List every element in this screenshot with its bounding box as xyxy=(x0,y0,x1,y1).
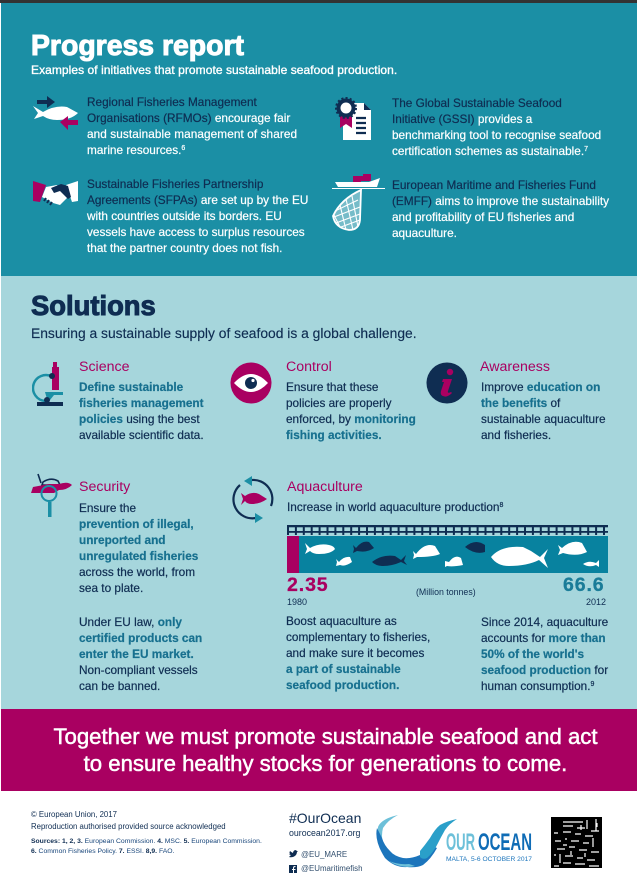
subheading: progress report: Examples of initiatives that promote sustainable seafood production. xyxy=(31,63,397,77)
text: security: prevention of illegal, xyxy=(79,517,194,531)
text: boost aquaculture: seafood production. xyxy=(286,678,399,692)
footer: sources xyxy=(31,838,262,855)
text: science xyxy=(79,380,204,442)
fish shoal xyxy=(305,542,599,568)
text: control xyxy=(286,380,416,442)
logo: our ocean xyxy=(376,815,532,868)
unit label: (Million tonnes) xyxy=(416,587,476,597)
icon: security xyxy=(31,474,72,517)
panel: progress report xyxy=(1,3,637,276)
text: RFMOs: Regional Fisheries Management xyxy=(87,95,257,109)
text: RFMOs xyxy=(87,95,297,157)
text: chart title: Increase in world aquaculture production8 xyxy=(287,500,503,514)
text: boost aquaculture: and make sure it becomes xyxy=(286,646,424,660)
text: EMFF: aquaculture. xyxy=(392,226,457,240)
text: security: across the world, from xyxy=(79,565,195,579)
banner: call to action xyxy=(1,709,637,791)
text: EMFF xyxy=(392,178,610,240)
text: science: fisheries management xyxy=(79,396,204,410)
icon: microscope xyxy=(32,362,63,406)
value: 1980: 2.35 xyxy=(287,574,329,596)
text: science: Define sustainable xyxy=(79,380,183,394)
hashtag: #OurOcean xyxy=(289,810,361,826)
text: awareness: sustainable aquaculture xyxy=(481,412,606,426)
footer: sources: 6. Common Fisheries Policy. 7. ESSI. 8,9. FAO. xyxy=(31,848,174,855)
text: RFMOs: and sustainable management of shared xyxy=(87,127,297,141)
text: GSSI: The Global Sustainable Seafood xyxy=(392,96,562,110)
logo: our ocean: OUR xyxy=(446,829,475,856)
heading: awareness: Awareness xyxy=(480,359,550,375)
text: security: sea to plate. xyxy=(79,581,143,595)
banner: call to action: to ensure healthy stocks for generations to come. xyxy=(84,751,567,776)
text: EU law: enter the EU market. xyxy=(79,647,194,661)
text: RFMOs: Organisations (RFMOs) encourage fair xyxy=(87,111,290,125)
text: since 2014: 50% of the world's xyxy=(481,647,584,661)
footer: sources: Sources: 1, 2, 3. European Commission. 4. MSC. 5. European Commission. xyxy=(31,838,262,845)
text: SFPAs: that the partner country does not fish. xyxy=(87,241,282,255)
text: EU law: Non-compliant vessels xyxy=(79,663,198,677)
icon: fish with arrows xyxy=(33,96,78,130)
text: GSSI: Initiative (GSSI) provides a xyxy=(392,112,532,126)
text: GSSI: benchmarking tool to recognise seafood xyxy=(392,128,601,142)
text: boost aquaculture: complementary to fisheries, xyxy=(286,630,430,644)
text: boost aquaculture: a part of sustainable xyxy=(286,662,401,676)
logo: our ocean: MALTA, 5-6 OCTOBER 2017 xyxy=(446,856,532,863)
text: awareness: the benefits of xyxy=(481,396,560,410)
banner: call to action: Together we must promote sustainable seafood and act xyxy=(53,724,598,749)
text: EMFF: and profitability of EU fisheries and xyxy=(392,210,574,224)
subheading: solutions: Ensuring a sustainable supply of seafood is a global challenge. xyxy=(31,325,417,341)
text: SFPAs: Agreements (SFPAs) are set up by the EU xyxy=(87,193,308,207)
icon: trawler and net xyxy=(332,174,385,231)
handle: facebook: @EUmaritimefish xyxy=(301,864,362,873)
footer: copyright: © European Union, 2017 xyxy=(31,810,117,819)
heading: science: Science xyxy=(79,359,129,375)
text: EMFF: (EMFF) aims to improve the sustainability xyxy=(392,194,609,208)
text: security: unregulated fisheries xyxy=(79,549,198,563)
text: SFPAs xyxy=(86,177,308,255)
icon: certificate xyxy=(335,97,371,140)
text: control: enforced, by monitoring xyxy=(286,412,416,426)
text: EU law: Under EU law, only xyxy=(79,615,182,629)
handle: twitter: @EU_MARE xyxy=(301,850,347,859)
value: 2012: 66.6 xyxy=(563,574,605,596)
text: security: unreported and xyxy=(79,533,166,547)
icon: aquaculture cycle xyxy=(232,476,274,523)
icon: twitter xyxy=(289,850,298,858)
heading: security: Security xyxy=(79,479,130,495)
text: since 2014: accounts for more than xyxy=(481,631,606,645)
text: EU law: can be banned. xyxy=(79,679,160,693)
icon: handshake xyxy=(33,181,78,206)
text: SFPAs: with countries outside its borders. EU xyxy=(87,209,282,223)
heading: solutions: Solutions xyxy=(31,290,156,321)
text: SFPAs: vessels have access to surplus resources xyxy=(87,225,305,239)
text: EMFF: European Maritime and Fisheries Fund xyxy=(392,178,596,192)
text: since 2014: human consumption.9 xyxy=(481,679,594,693)
text: since 2014: seafood production for xyxy=(481,663,608,677)
text: EU law: certified products can xyxy=(79,631,202,645)
heading: progress report: Progress report xyxy=(31,30,244,62)
text: EU law xyxy=(79,615,202,693)
QR code xyxy=(551,817,602,868)
text: since 2014 xyxy=(481,615,608,693)
page edge xyxy=(0,0,637,3)
year: 2012: 2012 xyxy=(586,597,606,607)
text: science: policies using the best xyxy=(79,412,200,426)
text: control: fishing activities. xyxy=(286,428,382,442)
icon: facebook xyxy=(289,865,297,873)
text: GSSI: certification schemes as sustainable.7 xyxy=(392,144,588,158)
text: GSSI xyxy=(392,96,601,158)
website: ourocean2017.org xyxy=(289,828,360,838)
heading: control: Control xyxy=(286,359,332,375)
text: science: available scientific data. xyxy=(79,428,204,442)
icon: eye xyxy=(230,362,272,404)
text: security: Ensure the xyxy=(79,501,136,515)
text: since 2014: Since 2014, aquaculture xyxy=(481,615,608,629)
panel: solutions xyxy=(1,276,637,709)
text: RFMOs: marine resources.6 xyxy=(87,143,185,157)
text: control: Ensure that these xyxy=(286,380,378,394)
text: SFPAs: Sustainable Fisheries Partnership xyxy=(87,177,263,191)
text: control: policies are properly xyxy=(286,396,392,410)
year: 1980: 1980 xyxy=(287,597,307,607)
text: awareness xyxy=(481,380,606,442)
text: boost aquaculture xyxy=(286,614,430,692)
chart: world aquaculture production xyxy=(287,525,608,573)
icon: information xyxy=(426,362,468,404)
footer: copyright: Reproduction authorised provided source acknowledged xyxy=(31,822,226,831)
text: boost aquaculture: Boost aquaculture as xyxy=(286,614,397,628)
text: awareness: Improve education on xyxy=(481,380,600,394)
heading: aquaculture: Aquaculture xyxy=(287,479,363,495)
text: security xyxy=(79,501,198,595)
footer: copyright xyxy=(31,810,226,831)
text: awareness: and fisheries. xyxy=(481,428,551,442)
